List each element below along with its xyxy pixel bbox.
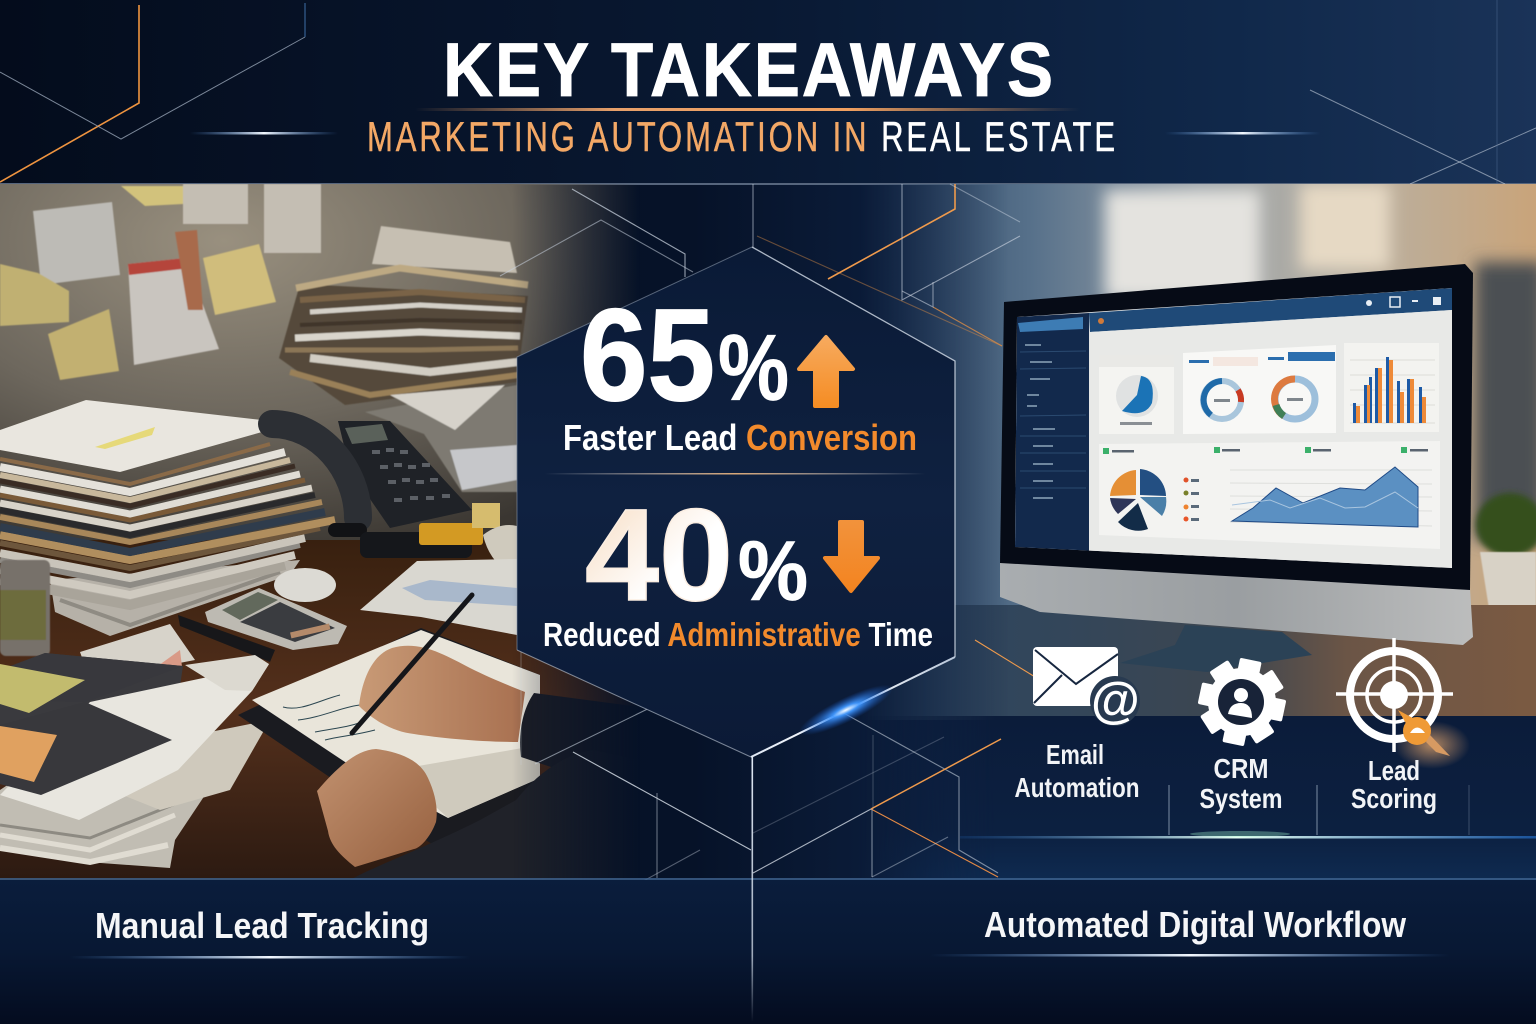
icon row dividers and glow line xyxy=(960,785,1536,838)
photo: manual paperwork desk xyxy=(0,184,640,880)
header band xyxy=(0,0,1536,185)
photo: right office background xyxy=(860,184,1536,720)
label: lead: Lead xyxy=(1368,755,1420,786)
sidebar xyxy=(1015,313,1089,552)
jar xyxy=(0,560,50,656)
jacket sleeves xyxy=(350,693,640,880)
pen tray xyxy=(178,615,275,662)
icon: lead scoring target xyxy=(1336,638,1470,769)
resting hand xyxy=(317,749,437,867)
subtitle: MARKETING AUTOMATION IN REAL ESTATE xyxy=(367,113,1118,160)
footer band xyxy=(0,757,1536,1024)
label: scoring: Scoring xyxy=(1351,783,1437,814)
icon: email automation: @ xyxy=(1091,672,1140,728)
title: KEY TAKEAWAYS xyxy=(443,28,1055,113)
monitor chin xyxy=(1000,560,1473,645)
monitor bezel xyxy=(1000,264,1473,590)
label: system: System xyxy=(1200,783,1282,814)
scattered documents lower left xyxy=(0,624,270,868)
accent lines middle xyxy=(500,184,1040,912)
stat: 65 percent: % xyxy=(718,315,789,420)
plant xyxy=(1476,493,1536,557)
card: gauge pie xyxy=(1099,367,1174,434)
stat: 40 percent: 40 xyxy=(585,481,733,628)
icon: crm gear xyxy=(1198,658,1286,746)
background paper pile xyxy=(279,226,528,492)
label: automation: Automation xyxy=(1014,772,1140,803)
right lower panel xyxy=(860,716,1536,880)
label: reduced administrative time: Reduced Administrative Time xyxy=(543,616,933,653)
desk xyxy=(860,605,1536,720)
monitor stand xyxy=(1120,625,1312,672)
telephone xyxy=(272,421,500,558)
calculator xyxy=(205,588,347,650)
notebook xyxy=(238,628,540,848)
footer glow line right xyxy=(930,954,1450,956)
screen xyxy=(1010,280,1460,570)
card: donuts xyxy=(1183,345,1336,434)
footer label: manual: Manual Lead Tracking xyxy=(95,905,429,946)
bowl xyxy=(483,525,517,560)
label: crm: CRM xyxy=(1214,753,1268,784)
label: email: Email xyxy=(1046,739,1104,770)
light flare xyxy=(751,657,955,757)
card: bar chart xyxy=(1344,343,1439,432)
wall notes xyxy=(0,184,321,380)
main paper stack xyxy=(0,400,335,636)
office wall xyxy=(0,184,640,564)
pen xyxy=(352,595,472,733)
monitor xyxy=(1000,264,1473,672)
stat divider xyxy=(545,473,925,474)
top bar xyxy=(1089,288,1452,332)
card: pie and area chart xyxy=(1099,441,1440,549)
stat: 40 percent: % xyxy=(738,524,808,618)
mouse xyxy=(274,568,336,602)
writing hand xyxy=(359,646,525,742)
arrow up xyxy=(799,337,853,406)
arrow down xyxy=(825,522,878,591)
footer glow line left xyxy=(70,956,470,958)
stats hexagon panel xyxy=(517,247,955,757)
title divider xyxy=(415,108,1080,111)
desk surface xyxy=(0,540,640,880)
content area xyxy=(1089,310,1452,568)
plant pot xyxy=(1480,551,1536,605)
reference document xyxy=(360,559,517,635)
stat: 65 percent xyxy=(580,281,789,428)
stat: 40 percent xyxy=(585,481,808,628)
stat: 65 percent: 65 xyxy=(580,281,715,428)
label: faster lead conversion: Faster Lead Conversion xyxy=(563,417,917,458)
dart xyxy=(1398,710,1450,756)
icon: email automation xyxy=(1033,647,1140,728)
footer label: automated: Automated Digital Workflow xyxy=(984,904,1407,945)
